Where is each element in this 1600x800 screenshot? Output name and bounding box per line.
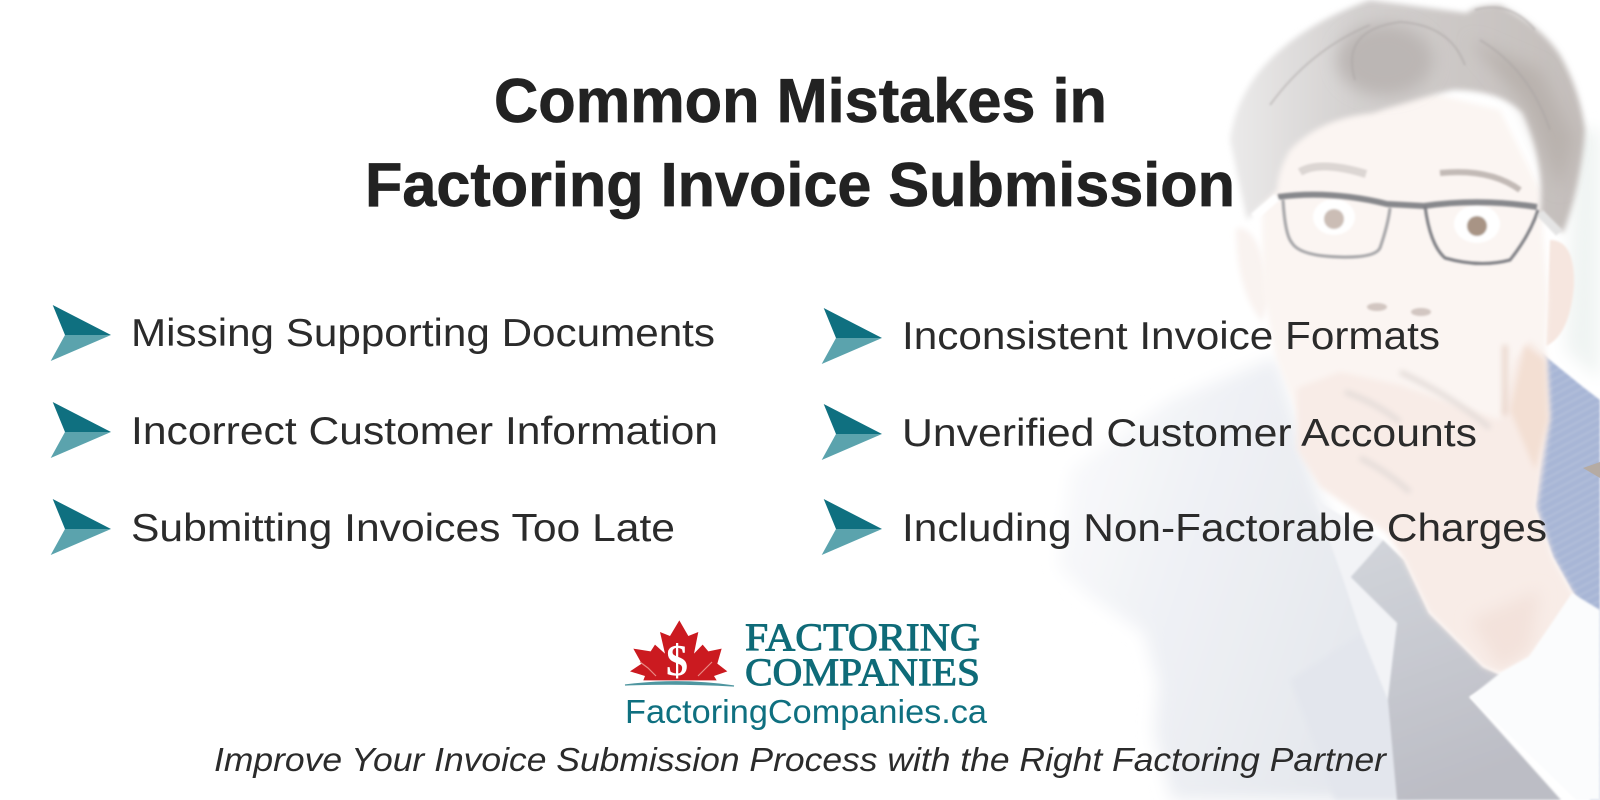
title line 2: Factoring Invoice Submission bbox=[365, 151, 1235, 220]
jacket lapel bbox=[1290, 633, 1400, 800]
title bbox=[365, 67, 1235, 220]
right ear bbox=[1546, 240, 1574, 346]
arrow icon bbox=[822, 499, 882, 555]
suit pocket shadow bbox=[1583, 462, 1600, 478]
logo wordmark line 1: FACTORING bbox=[745, 616, 980, 659]
nostrils bbox=[1367, 303, 1431, 316]
eyebrows bbox=[1300, 166, 1520, 190]
eyes bbox=[1313, 199, 1500, 243]
list: right column bbox=[822, 308, 1547, 555]
arrow icon bbox=[822, 404, 882, 460]
item: including non-factorable charges: Including Non-Factorable Charges bbox=[902, 507, 1547, 550]
icon: red maple leaf with dollar sign: $ bbox=[666, 636, 688, 685]
item: inconsistent invoice formats: Inconsistent Invoice Formats bbox=[902, 315, 1440, 358]
dark tie and lower jacket bbox=[1351, 540, 1561, 800]
item: incorrect customer information: Incorrect Customer Information bbox=[131, 410, 718, 453]
hair side shade bbox=[1470, 40, 1575, 190]
finger shadows bbox=[1345, 345, 1505, 492]
shirt collar bbox=[1315, 500, 1397, 700]
arrow icon bbox=[822, 308, 882, 364]
hand over mouth bbox=[1297, 340, 1577, 673]
item: unverified customer accounts: Unverified Customer Accounts bbox=[902, 412, 1477, 455]
hair bbox=[1230, 0, 1585, 233]
face bbox=[1262, 90, 1548, 440]
list: left column bbox=[51, 305, 718, 555]
title line 1: Common Mistakes in bbox=[494, 67, 1107, 136]
arrow icon bbox=[51, 305, 111, 361]
wrist shading bbox=[1470, 590, 1540, 670]
item: submitting invoices too late: Submitting Invoices Too Late bbox=[131, 507, 675, 550]
photo backdrop bbox=[1565, 130, 1600, 380]
white shirt cuff bbox=[1470, 593, 1600, 800]
grey jacket bbox=[1058, 357, 1420, 800]
arrow icon bbox=[51, 402, 111, 458]
blue striped suit bbox=[1535, 352, 1600, 800]
website url: FactoringCompanies.ca bbox=[625, 693, 988, 730]
arrow icon bbox=[51, 499, 111, 555]
left ear bbox=[1236, 228, 1270, 322]
glasses bbox=[1254, 195, 1559, 264]
icon: red maple leaf with dollar sign bbox=[625, 620, 734, 686]
item: missing supporting documents: Missing Supporting Documents bbox=[131, 312, 715, 355]
tagline: Improve Your Invoice Submission Process with the Right Factoring Partner bbox=[214, 741, 1388, 778]
thumb shading bbox=[1510, 345, 1548, 470]
photo: surprised man covering mouth bbox=[1058, 0, 1600, 800]
dark hair curl bbox=[1337, 24, 1433, 96]
logo wordmark line 2: COMPANIES bbox=[745, 651, 980, 694]
logo: Factoring Companies bbox=[625, 616, 988, 730]
hair strands bbox=[1270, 8, 1550, 130]
